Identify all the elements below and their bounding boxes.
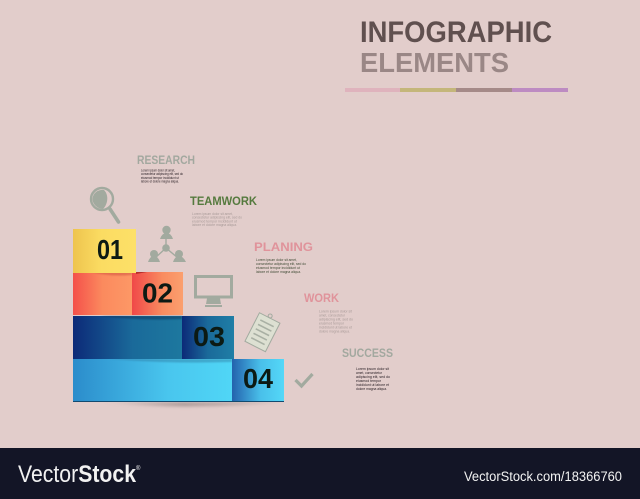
step 03 xyxy=(73,316,234,359)
step 02 xyxy=(73,272,183,315)
planing label: Lorem ipsum dolor sit amet, xyxy=(256,258,297,262)
footer bar xyxy=(0,448,640,499)
work label: eiusmod tempor xyxy=(319,322,345,326)
research label: RESEARCH xyxy=(137,153,195,167)
success label: incididunt ut labore et xyxy=(356,383,389,387)
work label xyxy=(304,291,353,334)
work label: Lorem ipsum dolor sit xyxy=(319,310,352,314)
success label: eiusmod tempor xyxy=(356,379,382,383)
work label: incididunt ut labore et xyxy=(319,326,352,330)
teamwork label: labore et dolore magna aliqua. xyxy=(192,223,237,227)
title: INFOGRAPHIC xyxy=(360,16,552,49)
success label: dolore magna aliqua. xyxy=(356,387,387,391)
planing label xyxy=(254,240,313,274)
research label: labore et dolore magna aliqua. xyxy=(141,180,179,184)
footer bar: ® xyxy=(136,465,141,472)
title xyxy=(360,16,552,78)
research label xyxy=(137,153,195,184)
icon: monitor xyxy=(196,276,232,307)
research label: Lorem ipsum dolor sit amet, xyxy=(141,168,175,172)
planing label: PLANING xyxy=(254,240,313,254)
teamwork label: consectetur adipiscing elit, sed do xyxy=(192,216,242,220)
research label: eiusmod tempor incididunt ut xyxy=(141,176,179,180)
teamwork label: eiusmod tempor incididunt ut xyxy=(192,220,237,224)
success label: Lorem ipsum dolor sit xyxy=(356,367,389,371)
title: ELEMENTS xyxy=(360,47,509,78)
icon: clipboard xyxy=(245,309,282,352)
work label: amet, consectetur xyxy=(319,314,346,318)
step 01 xyxy=(73,229,147,274)
step 03: 03 xyxy=(193,321,225,352)
step 01: 01 xyxy=(97,234,123,265)
success label: amet, consectetur xyxy=(356,371,383,375)
teamwork label: TEAMWORK xyxy=(190,194,257,208)
research label: consectetur adipiscing elit, sed do xyxy=(141,172,183,176)
teamwork label: Lorem ipsum dolor sit amet, xyxy=(192,212,233,216)
footer bar: VectorStock xyxy=(18,461,137,488)
title colour bar xyxy=(345,88,568,92)
step 02: 02 xyxy=(142,278,173,308)
step 04 xyxy=(73,359,284,402)
icon: check mark xyxy=(296,374,312,386)
icon: team xyxy=(148,226,186,262)
icon: magnifier xyxy=(91,188,118,222)
work label: dolore magna aliqua. xyxy=(319,330,350,334)
footer bar: VectorStock.com/18366760 xyxy=(464,469,622,484)
planing label: consectetur adipiscing elit, sed do xyxy=(256,262,306,266)
work label: WORK xyxy=(304,291,339,305)
success label: adipiscing elit, sed do xyxy=(356,375,390,379)
success label: SUCCESS xyxy=(342,346,393,360)
success label xyxy=(342,346,393,391)
planing label: eiusmod tempor incididunt ut xyxy=(256,266,300,270)
work label: adipiscing elit, sed do xyxy=(319,318,353,322)
step 04: 04 xyxy=(243,363,273,394)
planing label: labore et dolore magna aliqua. xyxy=(256,270,301,274)
ground shadow xyxy=(100,402,284,406)
teamwork label xyxy=(190,194,257,227)
